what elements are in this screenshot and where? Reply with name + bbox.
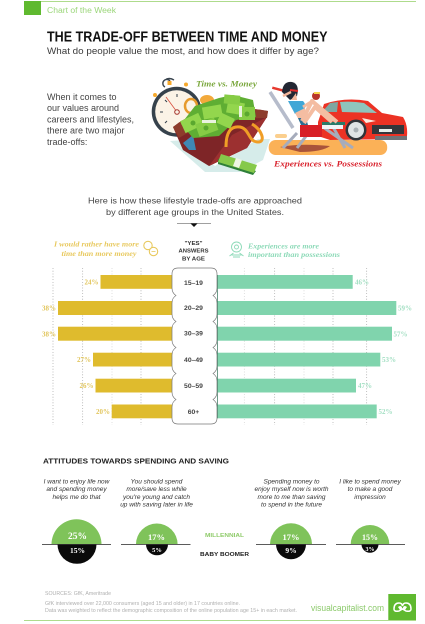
intro text: When it comes to [47, 92, 117, 102]
header band: Chart of the Week [47, 6, 117, 15]
intro text: trade-offs: [47, 137, 87, 147]
legend: more time: I would rather have more [53, 240, 140, 248]
semicircle chart 2: 5% [152, 547, 162, 554]
pointer divider [177, 223, 211, 227]
icon: woman [282, 82, 337, 125]
statement 1: helps me do that [52, 494, 102, 501]
shadow [170, 139, 270, 172]
age column: 50–59 [184, 383, 203, 390]
age column [172, 268, 217, 424]
statement 2: up with saving later in life [120, 502, 193, 508]
footer logo [388, 594, 416, 620]
percent labels: experiences over possessions: 59% [398, 304, 412, 312]
semicircle chart 4: 15% [362, 533, 378, 542]
legend column header: BY AGE [182, 256, 205, 262]
percent labels: experiences over possessions: 52% [378, 408, 392, 416]
percent labels: experiences over possessions: 53% [382, 356, 396, 364]
icon: stopwatch [152, 78, 202, 137]
statement 3: Spending money to [263, 478, 320, 486]
series label: baby boomer: BABY BOOMER [200, 552, 250, 558]
series label: millennial: MILLENNIAL [205, 533, 245, 539]
icon: red car [318, 100, 407, 140]
statement 3: enjoy myself now is worth [254, 486, 329, 493]
sources: GfK interviewed over 22,000 consumers (aged 15 and older) in 17 countries online. [45, 601, 240, 607]
percent labels: more time than money: 27% [77, 356, 91, 364]
legend column header: "YES" [184, 241, 203, 247]
ground [269, 140, 387, 155]
intro text: our values around [47, 103, 119, 113]
intro to chart: Here is how these lifestyle trade-offs are approached [88, 196, 302, 206]
sources: Data was weighted to reflect the demographic composition of the online population age 15+ in each market. [45, 608, 297, 614]
statement 3: to spend in the future [261, 502, 322, 508]
percent labels: more time than money: 20% [96, 408, 110, 416]
sources: SOURCES: GfK, Ameritrade [45, 591, 111, 597]
section heading: ATTITUDES TOWARDS SPENDING AND SAVING [43, 456, 229, 466]
percent labels: experiences over possessions: 46% [355, 278, 369, 286]
brand name: visualcapitalist.com [311, 603, 384, 613]
statement 1: I want to enjoy life now [44, 478, 111, 486]
icon: money bag [173, 94, 268, 166]
age column: 60+ [188, 409, 199, 416]
statement 3: more to me than saving [258, 494, 326, 501]
percent labels: experiences over possessions [355, 278, 412, 416]
percent labels: experiences over possessions: 47% [358, 382, 372, 390]
icon: deck chair [270, 86, 353, 148]
percent labels: more time than money: 38% [42, 330, 56, 338]
intro to chart: by different age groups in the United States. [106, 207, 284, 217]
statement 4: impression [354, 494, 386, 501]
label: experiences vs possessions: Experiences vs. Possessions [273, 160, 382, 168]
illustration: time vs money [152, 78, 270, 175]
legend column header: ANSWERS [178, 248, 209, 254]
icon: cash stack [218, 154, 257, 175]
age column: 30–39 [184, 330, 203, 338]
semicircle chart 1: 25% [68, 532, 87, 542]
age column: 15–19 [184, 280, 203, 287]
statement 1 [44, 478, 111, 501]
intro text [47, 92, 134, 147]
statement 2: You should spend [131, 478, 183, 486]
grid lines [53, 268, 367, 425]
footer rule [24, 620, 416, 621]
intro text: there are two major [47, 126, 125, 136]
illustration: experiences vs possessions [269, 82, 407, 155]
statement 4: I like to spend money [339, 478, 401, 486]
bar chart: experiences over possessions [217, 275, 396, 418]
label: time vs money: Time vs. Money [196, 80, 257, 88]
statement 3 [254, 478, 329, 508]
semicircle chart 1: 15% [70, 546, 85, 555]
legend: experiences: important than possessions [248, 250, 340, 259]
legend: more time [53, 240, 158, 258]
bar chart: more time than money [58, 275, 172, 418]
statement 1: and spending money [46, 486, 107, 493]
legend: experiences: Experiences are more [247, 242, 320, 250]
percent labels: more time than money [42, 278, 110, 416]
semicircle chart 3 [256, 523, 326, 559]
percent labels: more time than money: 26% [80, 382, 94, 390]
percent labels: more time than money: 38% [42, 304, 56, 312]
semicircle chart 1 [42, 519, 111, 564]
intro text: careers and lifestyles, [47, 114, 134, 124]
statement 2 [120, 478, 193, 508]
semicircle chart 3: 17% [282, 532, 300, 542]
semicircle chart 2 [121, 524, 190, 555]
icon: experiences globe [230, 242, 244, 257]
semicircle chart 3: 9% [285, 546, 297, 555]
legend column header [178, 241, 209, 262]
intro to chart [88, 196, 302, 217]
semicircle chart 2: 17% [148, 532, 165, 542]
subtitle: What do people value the most, and how does it differ by age? [47, 46, 319, 57]
statement 2: you're young and catch [122, 494, 190, 501]
statement 2: more/save less while [126, 486, 187, 493]
title: THE TRADE-OFF BETWEEN TIME AND MONEY [47, 28, 328, 46]
percent labels: experiences over possessions: 57% [394, 330, 408, 338]
age column: 40–49 [184, 357, 203, 364]
sources [45, 591, 297, 614]
legend: more time: time than more money [62, 249, 137, 258]
semicircle chart 4: 3% [366, 547, 374, 553]
statement 4 [339, 478, 401, 501]
header band [24, 1, 416, 15]
statement 4: to make a good [348, 486, 393, 493]
semicircle chart 4 [336, 525, 405, 553]
age column: 20–29 [184, 305, 203, 312]
icon: coin and clock [144, 241, 158, 256]
percent labels: more time than money: 24% [84, 278, 98, 286]
legend: experiences [230, 242, 340, 259]
